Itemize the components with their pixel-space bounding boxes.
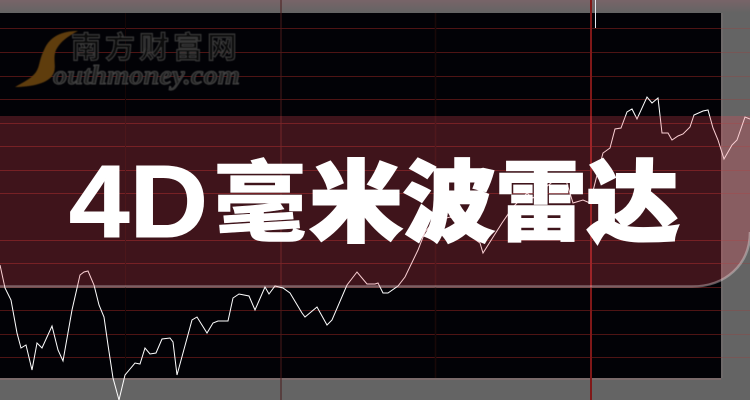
title character 5: 达 — [587, 154, 679, 253]
title character 3: 波 — [403, 154, 495, 253]
title character 2: 米 — [310, 154, 402, 253]
band bottom edge — [0, 232, 750, 286]
translucent title band — [0, 116, 750, 287]
title character 4: 雷 — [495, 154, 587, 253]
title latin part: 4D — [69, 144, 208, 259]
watermark domain: outhmoney.com — [53, 60, 240, 90]
white tick at top of chart — [594, 0, 596, 28]
watermark chinese name: 南方财富网 — [71, 32, 237, 65]
title — [69, 144, 679, 259]
icon: S swoosh — [15, 31, 78, 87]
watermark logo — [15, 31, 240, 90]
price line chart — [0, 97, 750, 400]
title character 1: 毫 — [214, 154, 306, 253]
